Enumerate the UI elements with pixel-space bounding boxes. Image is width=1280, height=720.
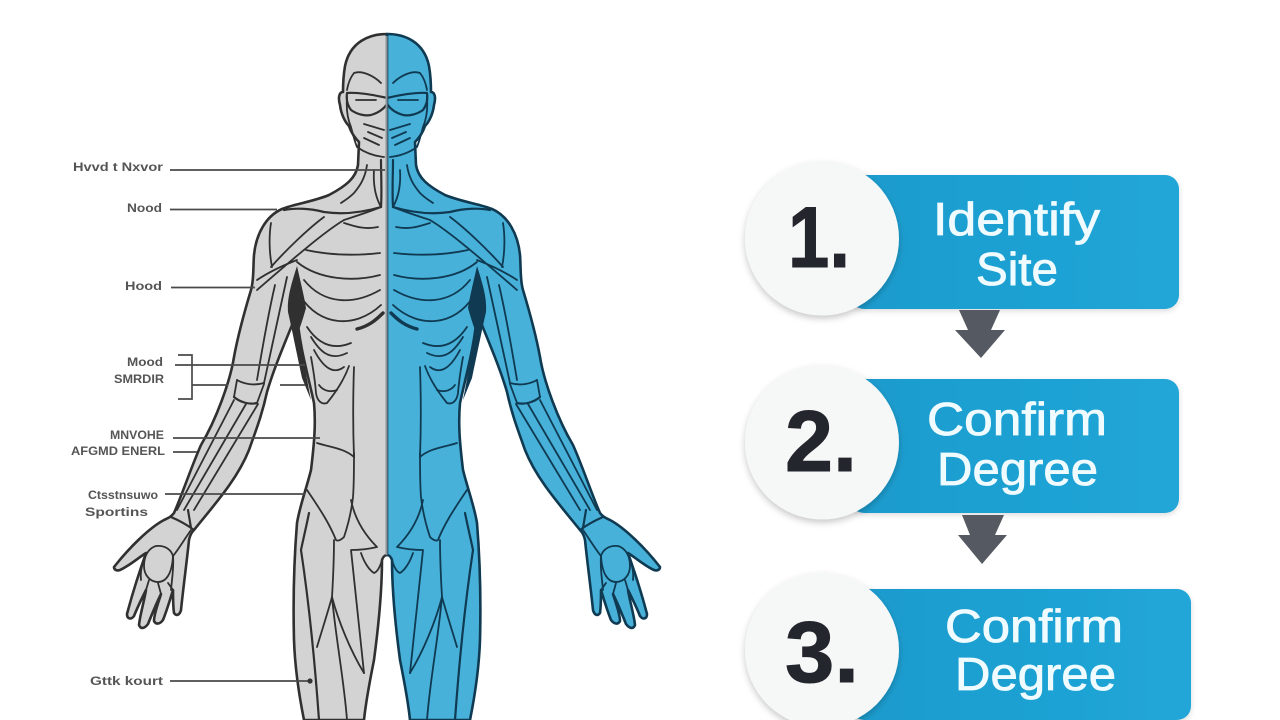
label: bracketed pair: Mood	[127, 355, 163, 369]
step 3 text	[945, 600, 1123, 700]
step 1 number: 1.	[788, 190, 850, 286]
step 2 text: Degree	[937, 443, 1098, 495]
step 2 text	[927, 393, 1107, 495]
step 2	[745, 366, 1179, 520]
left body half: grey	[114, 34, 387, 720]
step 2 number: 2.	[785, 394, 857, 490]
label: fourth pair: MNVOHE	[110, 428, 164, 442]
arrow 2	[958, 515, 1007, 564]
anatomical figure	[114, 34, 660, 720]
step 1	[745, 162, 1179, 316]
anatomical labels	[71, 160, 385, 688]
step 2 bar	[850, 379, 1179, 513]
step 1 text	[933, 193, 1100, 295]
step 3 number: 3.	[785, 605, 859, 701]
step 2 text: Confirm	[927, 393, 1107, 445]
label: bracketed pair: SMRDIR	[114, 372, 164, 386]
label: bracketed pair	[114, 355, 305, 399]
step 3 text: Degree	[955, 648, 1116, 700]
step 3 bar	[850, 589, 1191, 720]
label: bottom	[90, 674, 313, 688]
right body half: blue	[387, 34, 660, 720]
step 1 text: Site	[976, 243, 1058, 295]
label: bottom: Gttk kourt	[90, 674, 163, 688]
step 1 text: Identify	[933, 193, 1100, 245]
arrow 1	[955, 310, 1005, 358]
label: third	[125, 279, 255, 293]
label: fifth pair: Sportins	[85, 505, 148, 519]
step 3 text: Confirm	[945, 600, 1123, 652]
centre body line	[386, 36, 388, 555]
label: fifth pair: Ctsstnsuwo	[88, 488, 158, 502]
label: fifth pair	[85, 488, 305, 519]
step 2 circle	[745, 366, 899, 520]
label: second: Nood	[127, 201, 162, 215]
step 1 bar	[850, 175, 1179, 309]
step 3 circle	[745, 573, 899, 720]
step 3	[745, 573, 1191, 720]
label: fourth pair	[71, 428, 320, 458]
label: fourth pair: AFGMD ENERL	[71, 444, 165, 458]
label: third: Hood	[125, 279, 162, 293]
label: first: Hvvd t Nxvor	[73, 160, 163, 174]
step 1 circle	[745, 162, 899, 316]
